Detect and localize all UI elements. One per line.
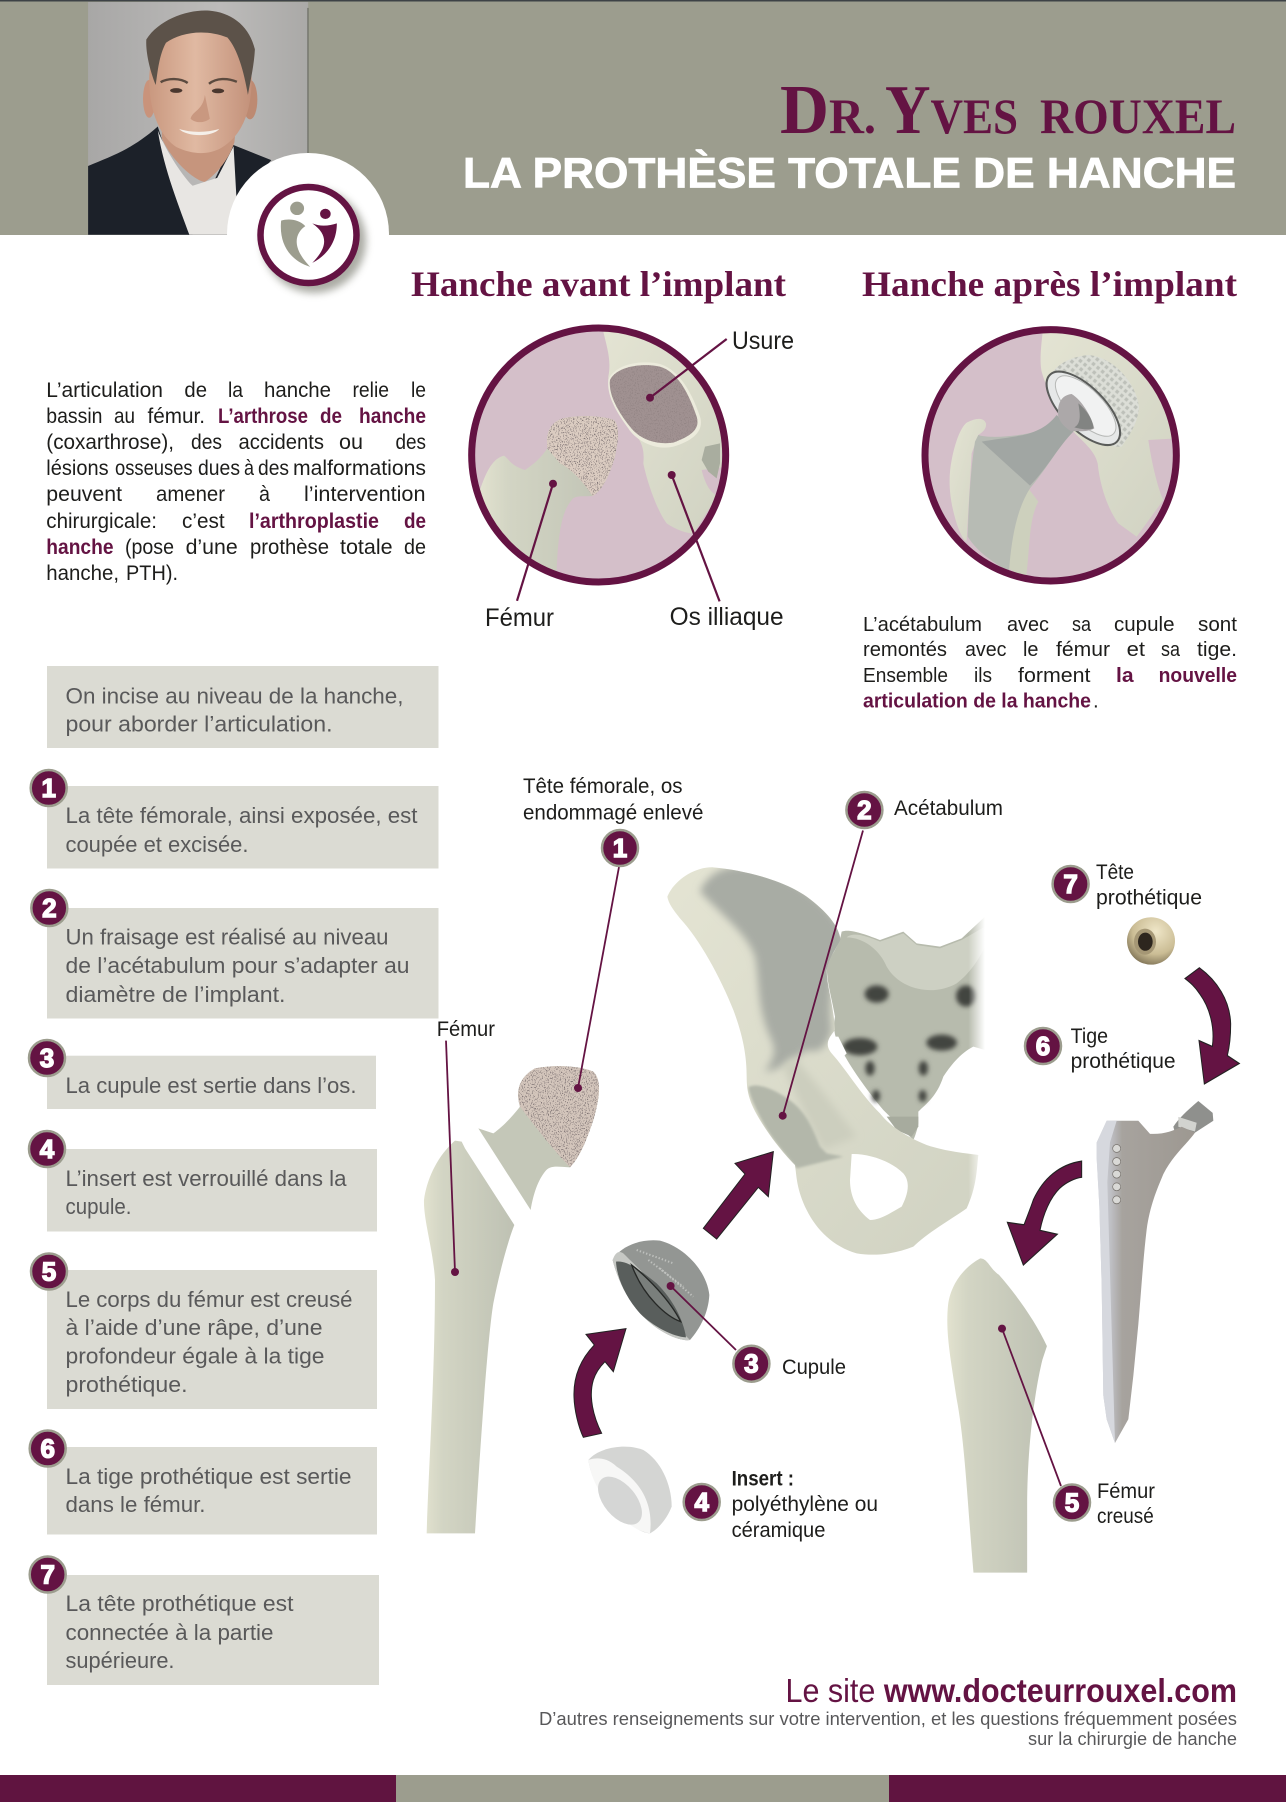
step 5: Le corps du fémur est creusé bbox=[66, 1287, 352, 1312]
step 6: dans le fémur. bbox=[66, 1492, 206, 1517]
step 5 bbox=[31, 1254, 377, 1409]
intro paragraph: fémur. bbox=[148, 404, 205, 428]
label: iliac bone bbox=[668, 471, 784, 631]
after paragraph: le bbox=[1023, 638, 1038, 661]
step 6: La tige prothétique est sertie bbox=[66, 1464, 352, 1489]
step 4 bbox=[29, 1131, 377, 1232]
after paragraph: nouvelle bbox=[1159, 664, 1237, 687]
website footer bbox=[539, 1672, 1237, 1749]
step 2: de l’acétabulum pour s’adapter au bbox=[66, 953, 410, 978]
step 1: La tête fémorale, ainsi exposée, est bbox=[66, 803, 418, 828]
intro paragraph: hanche bbox=[264, 378, 331, 402]
intro paragraph: la bbox=[228, 378, 243, 402]
label: wear bbox=[646, 327, 794, 402]
intro paragraph: de bbox=[404, 535, 426, 559]
intro paragraph: des bbox=[191, 430, 222, 454]
after paragraph: sa bbox=[1161, 638, 1181, 661]
step 5: prothétique. bbox=[66, 1372, 188, 1397]
callout: cup: Cupule bbox=[782, 1356, 846, 1379]
website footer: D’autres renseignements sur votre intervention, et les questions fréquemment posées bbox=[539, 1709, 1237, 1729]
step intro: pour aborder l’articulation. bbox=[66, 712, 332, 736]
callout: femoral head removed: Tête fémorale, os bbox=[523, 775, 682, 798]
doctor name: DR. bbox=[780, 72, 876, 149]
intro paragraph: (pose bbox=[125, 535, 174, 559]
after paragraph: fémur bbox=[1056, 638, 1110, 661]
step 4: 4 bbox=[40, 1134, 55, 1164]
intro paragraph: de bbox=[404, 509, 426, 533]
intro paragraph: à bbox=[244, 456, 254, 480]
step 6: 6 bbox=[40, 1434, 55, 1464]
callout: acetabulum bbox=[779, 792, 1003, 1120]
doctor name bbox=[780, 72, 1236, 149]
after paragraph: la bbox=[1116, 664, 1134, 687]
step 7: connectée à la partie bbox=[66, 1620, 274, 1645]
callout: stem: 6 bbox=[1036, 1031, 1050, 1061]
after paragraph bbox=[863, 613, 1237, 712]
step 7: supérieure. bbox=[66, 1648, 174, 1673]
callout: insert: céramique bbox=[732, 1519, 825, 1542]
intro paragraph: hanche bbox=[359, 404, 426, 428]
step 3: La cupule est sertie dans l’os. bbox=[66, 1073, 356, 1098]
label: femur bbox=[485, 480, 557, 632]
after paragraph: et bbox=[1127, 638, 1145, 661]
intro paragraph: ou bbox=[339, 430, 363, 454]
step 3 bbox=[29, 1040, 376, 1109]
callout: cup bbox=[667, 1282, 846, 1382]
callout: femoral head removed: 1 bbox=[613, 833, 627, 863]
after paragraph: avec bbox=[1007, 613, 1049, 636]
callout: insert: 4 bbox=[694, 1487, 709, 1517]
intro paragraph: L’articulation bbox=[46, 378, 163, 402]
after paragraph: Ensemble bbox=[863, 664, 948, 687]
intro paragraph: l’arthroplastie bbox=[249, 509, 379, 533]
intro paragraph bbox=[46, 378, 426, 585]
after paragraph: avec bbox=[965, 638, 1006, 661]
after paragraph: remontés bbox=[863, 638, 947, 661]
after paragraph: articulation de la hanche bbox=[863, 690, 1091, 712]
step intro bbox=[47, 666, 438, 748]
intro paragraph: lésions bbox=[46, 456, 109, 480]
intro paragraph: dues bbox=[198, 456, 240, 480]
website footer: sur la chirurgie de hanche bbox=[1028, 1729, 1237, 1749]
intro paragraph: L’arthrose bbox=[218, 404, 308, 428]
intro paragraph: amener bbox=[156, 482, 225, 506]
intro paragraph: prothèse bbox=[250, 535, 329, 559]
callout: prepared femur: 5 bbox=[1065, 1488, 1079, 1518]
doctor name: YVES bbox=[885, 72, 1018, 149]
bottom colour bars bbox=[0, 1775, 1286, 1802]
callout: prosthetic head: prothétique bbox=[1096, 886, 1202, 910]
callout: femoral head removed bbox=[523, 775, 703, 1092]
illustration: femoral stem bbox=[1097, 1101, 1213, 1443]
after paragraph: tige. bbox=[1197, 638, 1237, 661]
step 7: La tête prothétique est bbox=[66, 1591, 294, 1616]
intro paragraph: hanche, bbox=[46, 561, 119, 585]
step 1: 1 bbox=[41, 773, 56, 803]
header band bbox=[0, 0, 1286, 315]
panel: hip before implant bbox=[472, 327, 794, 632]
callout: femoral head removed: endommagé enlevé bbox=[523, 802, 703, 824]
intro paragraph: hanche bbox=[46, 535, 114, 559]
after paragraph: cupule bbox=[1114, 613, 1174, 636]
website footer: Le site www.docteurrouxel.com bbox=[786, 1672, 1237, 1709]
intro paragraph: malformations bbox=[293, 456, 426, 480]
step 5: à l’aide d’une râpe, d’une bbox=[66, 1315, 322, 1340]
intro paragraph: osseuses bbox=[115, 456, 193, 480]
callout: prosthetic head bbox=[1053, 861, 1202, 910]
intro paragraph: totale bbox=[340, 535, 393, 559]
step 1 bbox=[31, 770, 438, 868]
illustration: pelvis and sacrum bbox=[667, 866, 985, 1255]
callout: prepared femur: creusé bbox=[1097, 1505, 1154, 1528]
intro paragraph: c’est bbox=[182, 509, 225, 533]
step 7 bbox=[30, 1556, 379, 1685]
intro paragraph: de bbox=[320, 404, 342, 428]
step 4: L’insert est verrouillé dans la bbox=[66, 1166, 347, 1191]
step 1: coupée et excisée. bbox=[66, 832, 248, 857]
intro paragraph: peuvent bbox=[46, 482, 122, 506]
after paragraph: L’acétabulum bbox=[863, 613, 982, 636]
callout: stem: prothétique bbox=[1071, 1050, 1176, 1073]
intro paragraph: le bbox=[411, 378, 426, 402]
callout: insert bbox=[684, 1468, 878, 1542]
intro paragraph: au bbox=[114, 404, 135, 428]
document title: LA PROTHÈSE TOTALE DE HANCHE bbox=[463, 150, 1236, 198]
illustration: prosthetic head bbox=[1127, 917, 1175, 965]
after paragraph: . bbox=[1093, 690, 1099, 712]
callout: femur bbox=[437, 1018, 495, 1276]
callout: acetabulum: 2 bbox=[857, 795, 872, 825]
label: wear: Usure bbox=[732, 327, 794, 355]
intro paragraph: de bbox=[184, 378, 207, 402]
step 2: 2 bbox=[42, 893, 57, 923]
illustration: prepared femur bbox=[947, 1258, 1047, 1573]
circular view: arthritic joint bbox=[472, 327, 727, 582]
callout: insert: Insert : bbox=[732, 1468, 794, 1490]
intro paragraph: accidents bbox=[238, 430, 324, 454]
intro paragraph: relie bbox=[352, 378, 389, 402]
intro paragraph: des bbox=[258, 456, 289, 480]
callout: prepared femur bbox=[998, 1325, 1155, 1528]
step 2 bbox=[31, 890, 439, 1018]
callout: acetabulum: Acétabulum bbox=[894, 797, 1003, 820]
callout: stem: Tige bbox=[1071, 1025, 1108, 1048]
callout: femur: Fémur bbox=[437, 1018, 495, 1041]
callout: prosthetic head: 7 bbox=[1063, 869, 1078, 899]
step 4: cupule. bbox=[66, 1194, 132, 1219]
heading: after the implant: Hanche après l’implant bbox=[862, 264, 1237, 304]
portrait photo bbox=[88, 2, 309, 235]
step 3: 3 bbox=[40, 1043, 54, 1073]
after paragraph: sa bbox=[1072, 613, 1092, 636]
intro paragraph: à bbox=[259, 482, 270, 506]
panel: hip after implant bbox=[925, 327, 1178, 581]
intro paragraph: des bbox=[396, 430, 426, 454]
step 6 bbox=[30, 1430, 377, 1534]
callout: insert: polyéthylène ou bbox=[732, 1493, 878, 1516]
intro paragraph: bassin bbox=[46, 404, 102, 428]
callout: stem bbox=[1025, 1025, 1176, 1073]
after paragraph: ils bbox=[974, 664, 992, 687]
step 5: profondeur égale à la tige bbox=[66, 1344, 324, 1368]
arrow: head to stem bbox=[1185, 968, 1239, 1084]
step intro: On incise au niveau de la hanche, bbox=[66, 684, 404, 708]
intro paragraph: chirurgicale: bbox=[46, 509, 157, 533]
label: femur: Fémur bbox=[485, 604, 554, 632]
arrow: insert to cup bbox=[574, 1329, 626, 1437]
intro paragraph: l’intervention bbox=[304, 482, 426, 506]
step 7: 7 bbox=[40, 1560, 55, 1590]
after paragraph: forment bbox=[1018, 664, 1091, 687]
illustration: insert bbox=[588, 1447, 672, 1533]
after paragraph: sont bbox=[1198, 613, 1237, 636]
step 5: 5 bbox=[42, 1256, 56, 1286]
callout: cup: 3 bbox=[744, 1349, 759, 1379]
arrow: cup to acetabulum bbox=[703, 1152, 773, 1239]
panel: surgical steps bbox=[29, 666, 438, 1685]
panel: exploded diagram bbox=[424, 775, 1239, 1573]
label: iliac bone: Os illiaque bbox=[670, 603, 784, 631]
heading: before the implant: Hanche avant l’implant bbox=[411, 264, 786, 304]
arrow: stem to femur bbox=[1007, 1161, 1082, 1265]
illustration: cut femur and femoral head bbox=[424, 1063, 603, 1533]
icon: logo bbox=[260, 187, 366, 293]
step 2: Un fraisage est réalisé au niveau bbox=[66, 924, 388, 950]
intro paragraph: d’une bbox=[186, 535, 238, 559]
doctor name: ROUXEL bbox=[1040, 88, 1236, 144]
step 2: diamètre de l’implant. bbox=[66, 982, 286, 1007]
illustration: cup bbox=[613, 1240, 709, 1340]
intro paragraph: (coxarthrose), bbox=[46, 430, 174, 454]
intro paragraph: PTH). bbox=[126, 561, 178, 585]
callout: prosthetic head: Tête bbox=[1096, 861, 1134, 884]
callout: prepared femur: Fémur bbox=[1097, 1480, 1155, 1503]
